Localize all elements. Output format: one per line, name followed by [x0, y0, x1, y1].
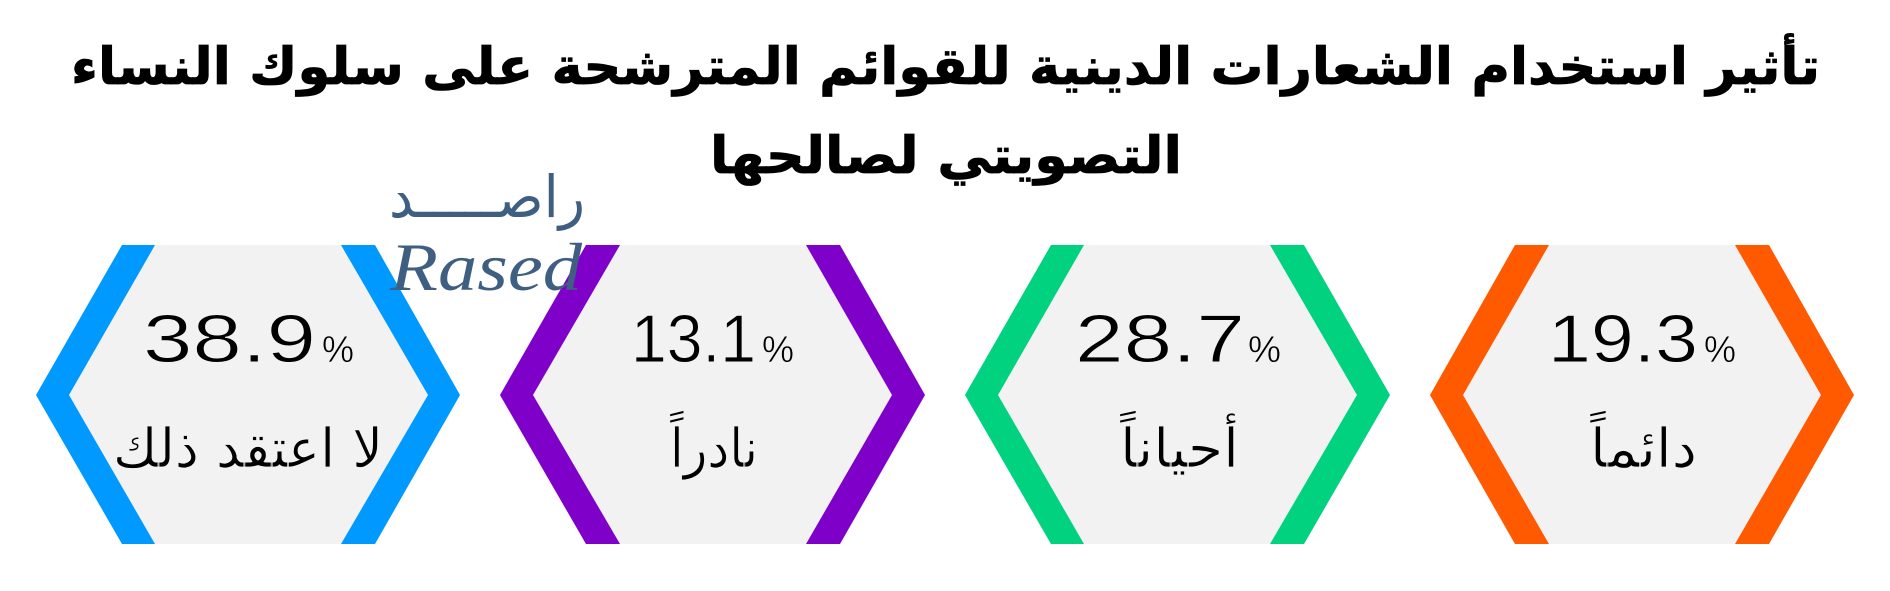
right chevron: [341, 245, 460, 544]
hexagon background: [965, 245, 1390, 544]
panel: rarely: [500, 245, 925, 544]
watermark logo: [389, 163, 585, 305]
value: 38.9: [143, 301, 316, 377]
title line 1: تأثير استخدام الشعارات الدينية للقوائم المترشحة على سلوك النساء: [71, 33, 1820, 97]
left chevron: [1430, 245, 1549, 544]
hexagon background: [36, 245, 460, 544]
right chevron: [806, 245, 925, 544]
left chevron: [965, 245, 1084, 544]
hexagon background: [1430, 245, 1854, 544]
logo latin text: Rased: [389, 229, 583, 305]
panel: never / don't think so: [36, 245, 460, 544]
value: 28.7: [1075, 301, 1245, 377]
panel: always: [1430, 245, 1854, 544]
left chevron: [36, 245, 155, 544]
right chevron: [1270, 245, 1390, 544]
label: لا اعتقد ذلك: [113, 417, 383, 480]
value: 19.3: [1548, 301, 1698, 377]
left chevron: [500, 245, 620, 544]
percent sign: %: [322, 329, 354, 370]
right chevron: [1735, 245, 1854, 544]
label: نادراً: [669, 410, 758, 480]
label: أحياناً: [1119, 410, 1239, 480]
percent sign: %: [762, 329, 794, 370]
percent sign: %: [1248, 329, 1281, 370]
percent sign: %: [1704, 329, 1736, 370]
value: 13.1: [631, 301, 756, 377]
label: دائماً: [1589, 410, 1697, 480]
title line 2: التصويتي لصالحها: [710, 127, 1182, 186]
title: [71, 33, 1820, 186]
panel: sometimes: [965, 245, 1390, 544]
hexagon background: [500, 245, 925, 544]
logo arabic text: راصـــــد: [389, 163, 585, 231]
